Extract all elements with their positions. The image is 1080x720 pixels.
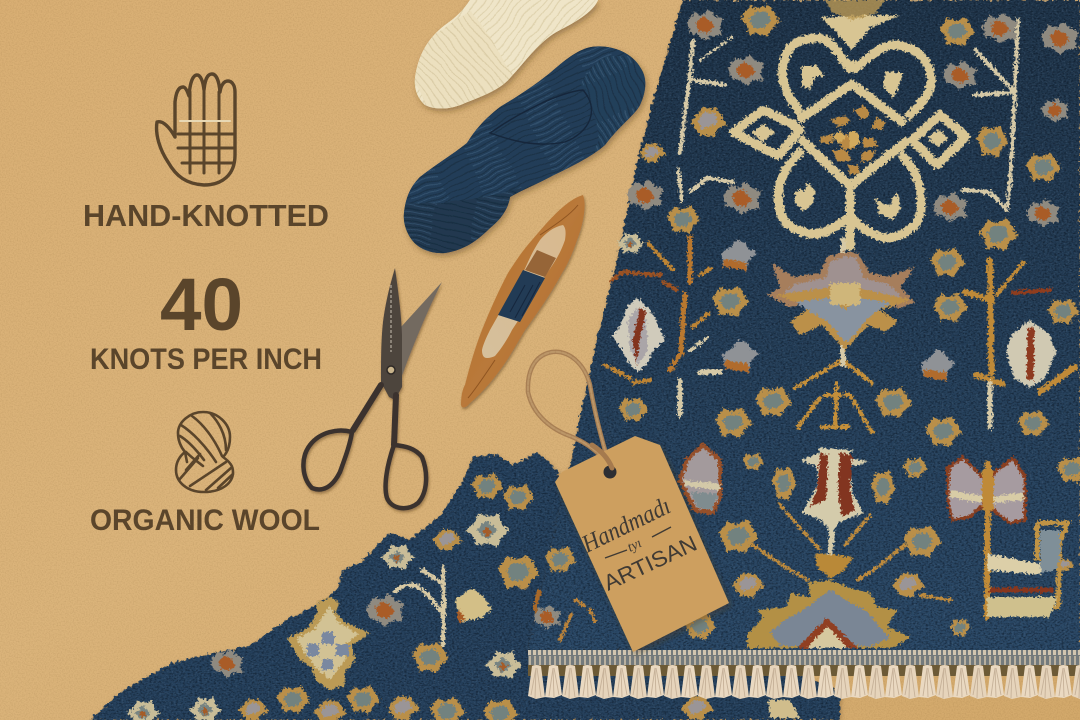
jute twine loop bbox=[528, 352, 610, 468]
rug small flowers bbox=[533, 4, 1080, 640]
rug medallion bbox=[734, 0, 966, 250]
navy yarn skein bbox=[402, 46, 650, 260]
icon: hand with knot grid bbox=[157, 74, 235, 185]
rug ivory motifs bbox=[612, 298, 1056, 578]
rug lotus motif bbox=[767, 252, 915, 350]
tag text: Handmadı bbox=[577, 492, 675, 559]
rug fringe bbox=[528, 650, 1080, 701]
tag text: tyı bbox=[625, 536, 644, 556]
rug bottom lotus bbox=[747, 580, 910, 648]
stat label: knots per inch: KNOTS PER INCH bbox=[90, 343, 322, 376]
hang tag bbox=[555, 436, 729, 652]
main rug bbox=[520, 0, 1080, 701]
scissors bbox=[303, 268, 442, 508]
lower folded rug bbox=[90, 450, 850, 720]
tag text bbox=[577, 492, 701, 596]
icon: yarn ball bbox=[176, 412, 233, 492]
cream yarn skein bbox=[414, 0, 602, 115]
rug stems and branches bbox=[560, 20, 1075, 640]
wooden shuttle bbox=[461, 195, 585, 407]
heading: hand-knotted: HAND-KNOTTED bbox=[83, 198, 329, 233]
stat: 40: 40 bbox=[160, 263, 243, 346]
tag text: ARTISAN bbox=[600, 531, 701, 596]
heading: organic wool: ORGANIC WOOL bbox=[90, 504, 320, 537]
rug axe and corner motif bbox=[948, 457, 1068, 617]
